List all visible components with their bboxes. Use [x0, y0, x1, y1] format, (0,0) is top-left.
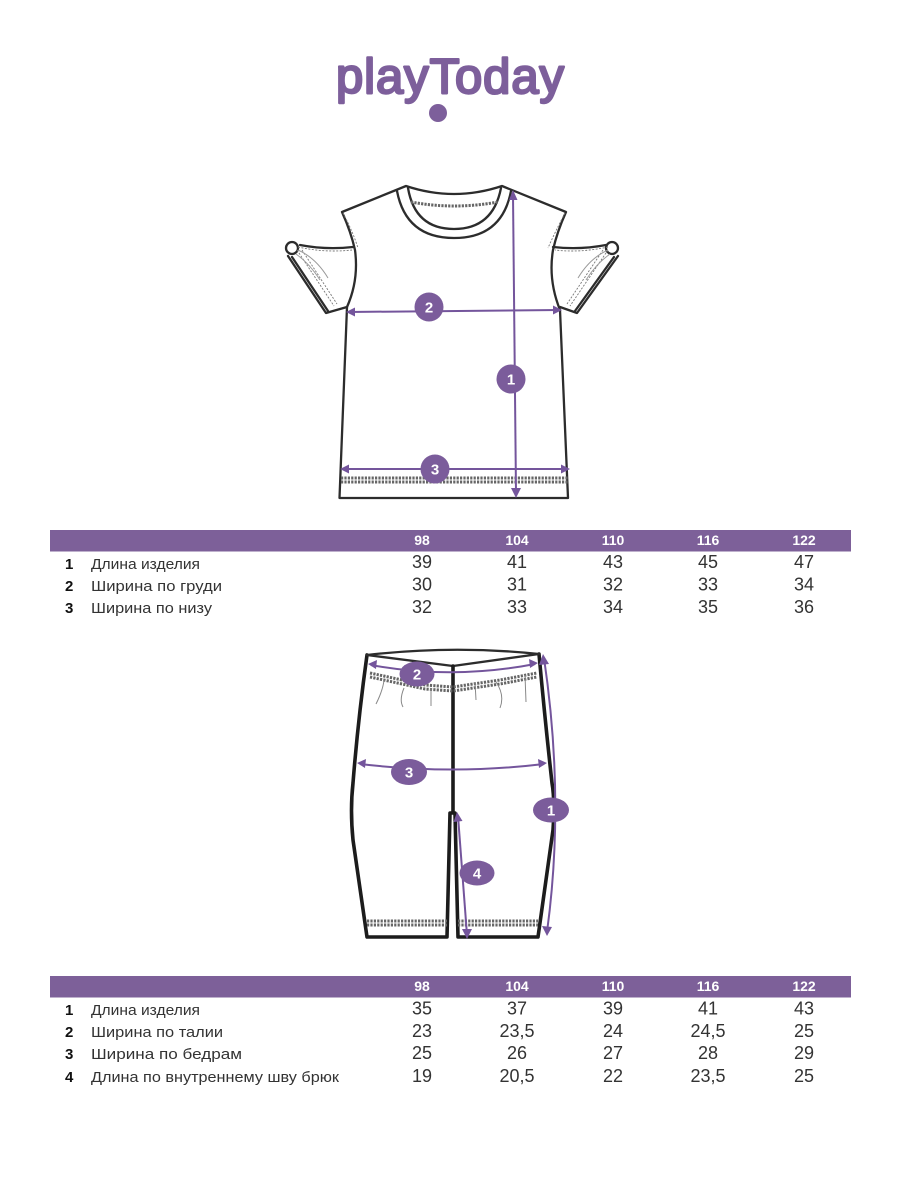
row 2: 34 — [794, 574, 814, 594]
measure 2: t-shirt chest width — [346, 292, 562, 322]
measure 3: t-shirt hem width: 3 — [431, 462, 439, 478]
measure 2: t-shirt chest width: 2 — [425, 300, 433, 316]
shorts waist stitching and gathers — [370, 673, 537, 708]
row 3: 32 — [412, 597, 432, 617]
row 3: 29 — [794, 1043, 814, 1063]
row 3: 26 — [507, 1043, 527, 1063]
t-shirt body outline — [340, 186, 568, 498]
row 2: 24,5 — [690, 1021, 726, 1041]
header row: 116 — [697, 978, 720, 994]
measure 4: shorts inseam: 4 — [473, 866, 482, 882]
row 4: 25 — [794, 1066, 814, 1086]
row 1: Длина изделия — [91, 556, 200, 573]
measure 2: shorts waist width — [368, 659, 538, 686]
row 1: 45 — [698, 552, 718, 572]
row 2 — [65, 1021, 814, 1041]
row 4: 19 — [412, 1066, 432, 1086]
measure 1: t-shirt length — [496, 190, 526, 498]
size table: shorts — [50, 976, 851, 1086]
row 4 — [65, 1066, 814, 1086]
row 4: 20,5 — [499, 1066, 535, 1086]
row 2: 2 — [65, 1024, 73, 1041]
row 3: 28 — [698, 1043, 718, 1063]
header row: 122 — [792, 978, 816, 994]
row 1: Длина изделия — [91, 1002, 200, 1019]
row 1: 43 — [603, 552, 623, 572]
measure 3: shorts hip width: 3 — [405, 764, 413, 782]
row 2: 32 — [603, 574, 623, 594]
t-shirt technical drawing — [286, 186, 618, 498]
measure 1: t-shirt length: 1 — [507, 372, 515, 388]
shorts outline — [352, 654, 554, 937]
row 3: 25 — [412, 1043, 432, 1063]
t-shirt hem stitching — [341, 478, 568, 482]
logo: playToday: playToday — [336, 50, 564, 104]
row 2: 24 — [603, 1021, 623, 1041]
row 1: 47 — [794, 552, 814, 572]
row 3: 3 — [65, 600, 73, 617]
header row: 122 — [792, 532, 816, 548]
shorts technical drawing — [352, 650, 554, 937]
header row: 116 — [697, 532, 720, 548]
header row: 104 — [505, 532, 529, 548]
row 3: 36 — [794, 597, 814, 617]
row 2: 30 — [412, 574, 432, 594]
size table: t-shirt — [50, 530, 851, 617]
row 4: 22 — [603, 1066, 623, 1086]
row 1 — [65, 998, 814, 1019]
row 3 — [65, 597, 814, 617]
row 2: 25 — [794, 1021, 814, 1041]
row 2: 31 — [507, 574, 527, 594]
header row: 104 — [505, 978, 529, 994]
t-shirt right sleeve — [548, 213, 618, 313]
measure 3: shorts hip width — [357, 759, 547, 785]
row 3: 33 — [507, 597, 527, 617]
row 1: 1 — [65, 556, 73, 573]
header row: 98 — [414, 978, 430, 994]
row 3 — [65, 1043, 814, 1063]
header row: 98 — [414, 532, 430, 548]
row 2: 2 — [65, 578, 73, 595]
row 2: 23,5 — [499, 1021, 535, 1041]
row 1: 41 — [507, 552, 527, 572]
row 1: 35 — [412, 998, 432, 1018]
row 3: 34 — [603, 597, 623, 617]
row 2: 23 — [412, 1021, 432, 1041]
measure 1: shorts length: 1 — [547, 802, 555, 820]
row 3: 35 — [698, 597, 718, 617]
row 3: Ширина по низу — [91, 600, 213, 617]
row 1: 41 — [698, 998, 718, 1018]
row 1: 37 — [507, 998, 527, 1018]
row 3: Ширина по бедрам — [91, 1046, 242, 1063]
row 4: 23,5 — [690, 1066, 726, 1086]
row 4: Длина по внутреннему шву брюк — [91, 1069, 339, 1086]
shorts waistband — [367, 650, 539, 812]
header row: 110 — [602, 532, 625, 548]
row 1 — [65, 552, 814, 573]
measure 3: t-shirt hem width — [340, 454, 570, 484]
t-shirt collar — [397, 188, 511, 238]
row 2: Ширина по талии — [91, 1024, 223, 1041]
header row — [50, 976, 851, 998]
row 2: 33 — [698, 574, 718, 594]
row 3: 27 — [603, 1043, 623, 1063]
row 1: 1 — [65, 1002, 73, 1019]
row 4: 4 — [65, 1069, 74, 1086]
row 1: 39 — [603, 998, 623, 1018]
header row: 110 — [602, 978, 625, 994]
measure 2: shorts waist width: 2 — [413, 666, 421, 684]
row 2: Ширина по груди — [91, 578, 222, 595]
header row — [50, 530, 851, 552]
measure 4: shorts inseam — [454, 812, 494, 939]
measure 1: shorts length — [533, 654, 569, 936]
row 1: 39 — [412, 552, 432, 572]
row 2 — [65, 574, 814, 595]
row 1: 43 — [794, 998, 814, 1018]
t-shirt left sleeve — [286, 213, 358, 313]
row 3: 3 — [65, 1046, 73, 1063]
shorts hem stitching — [367, 921, 538, 925]
